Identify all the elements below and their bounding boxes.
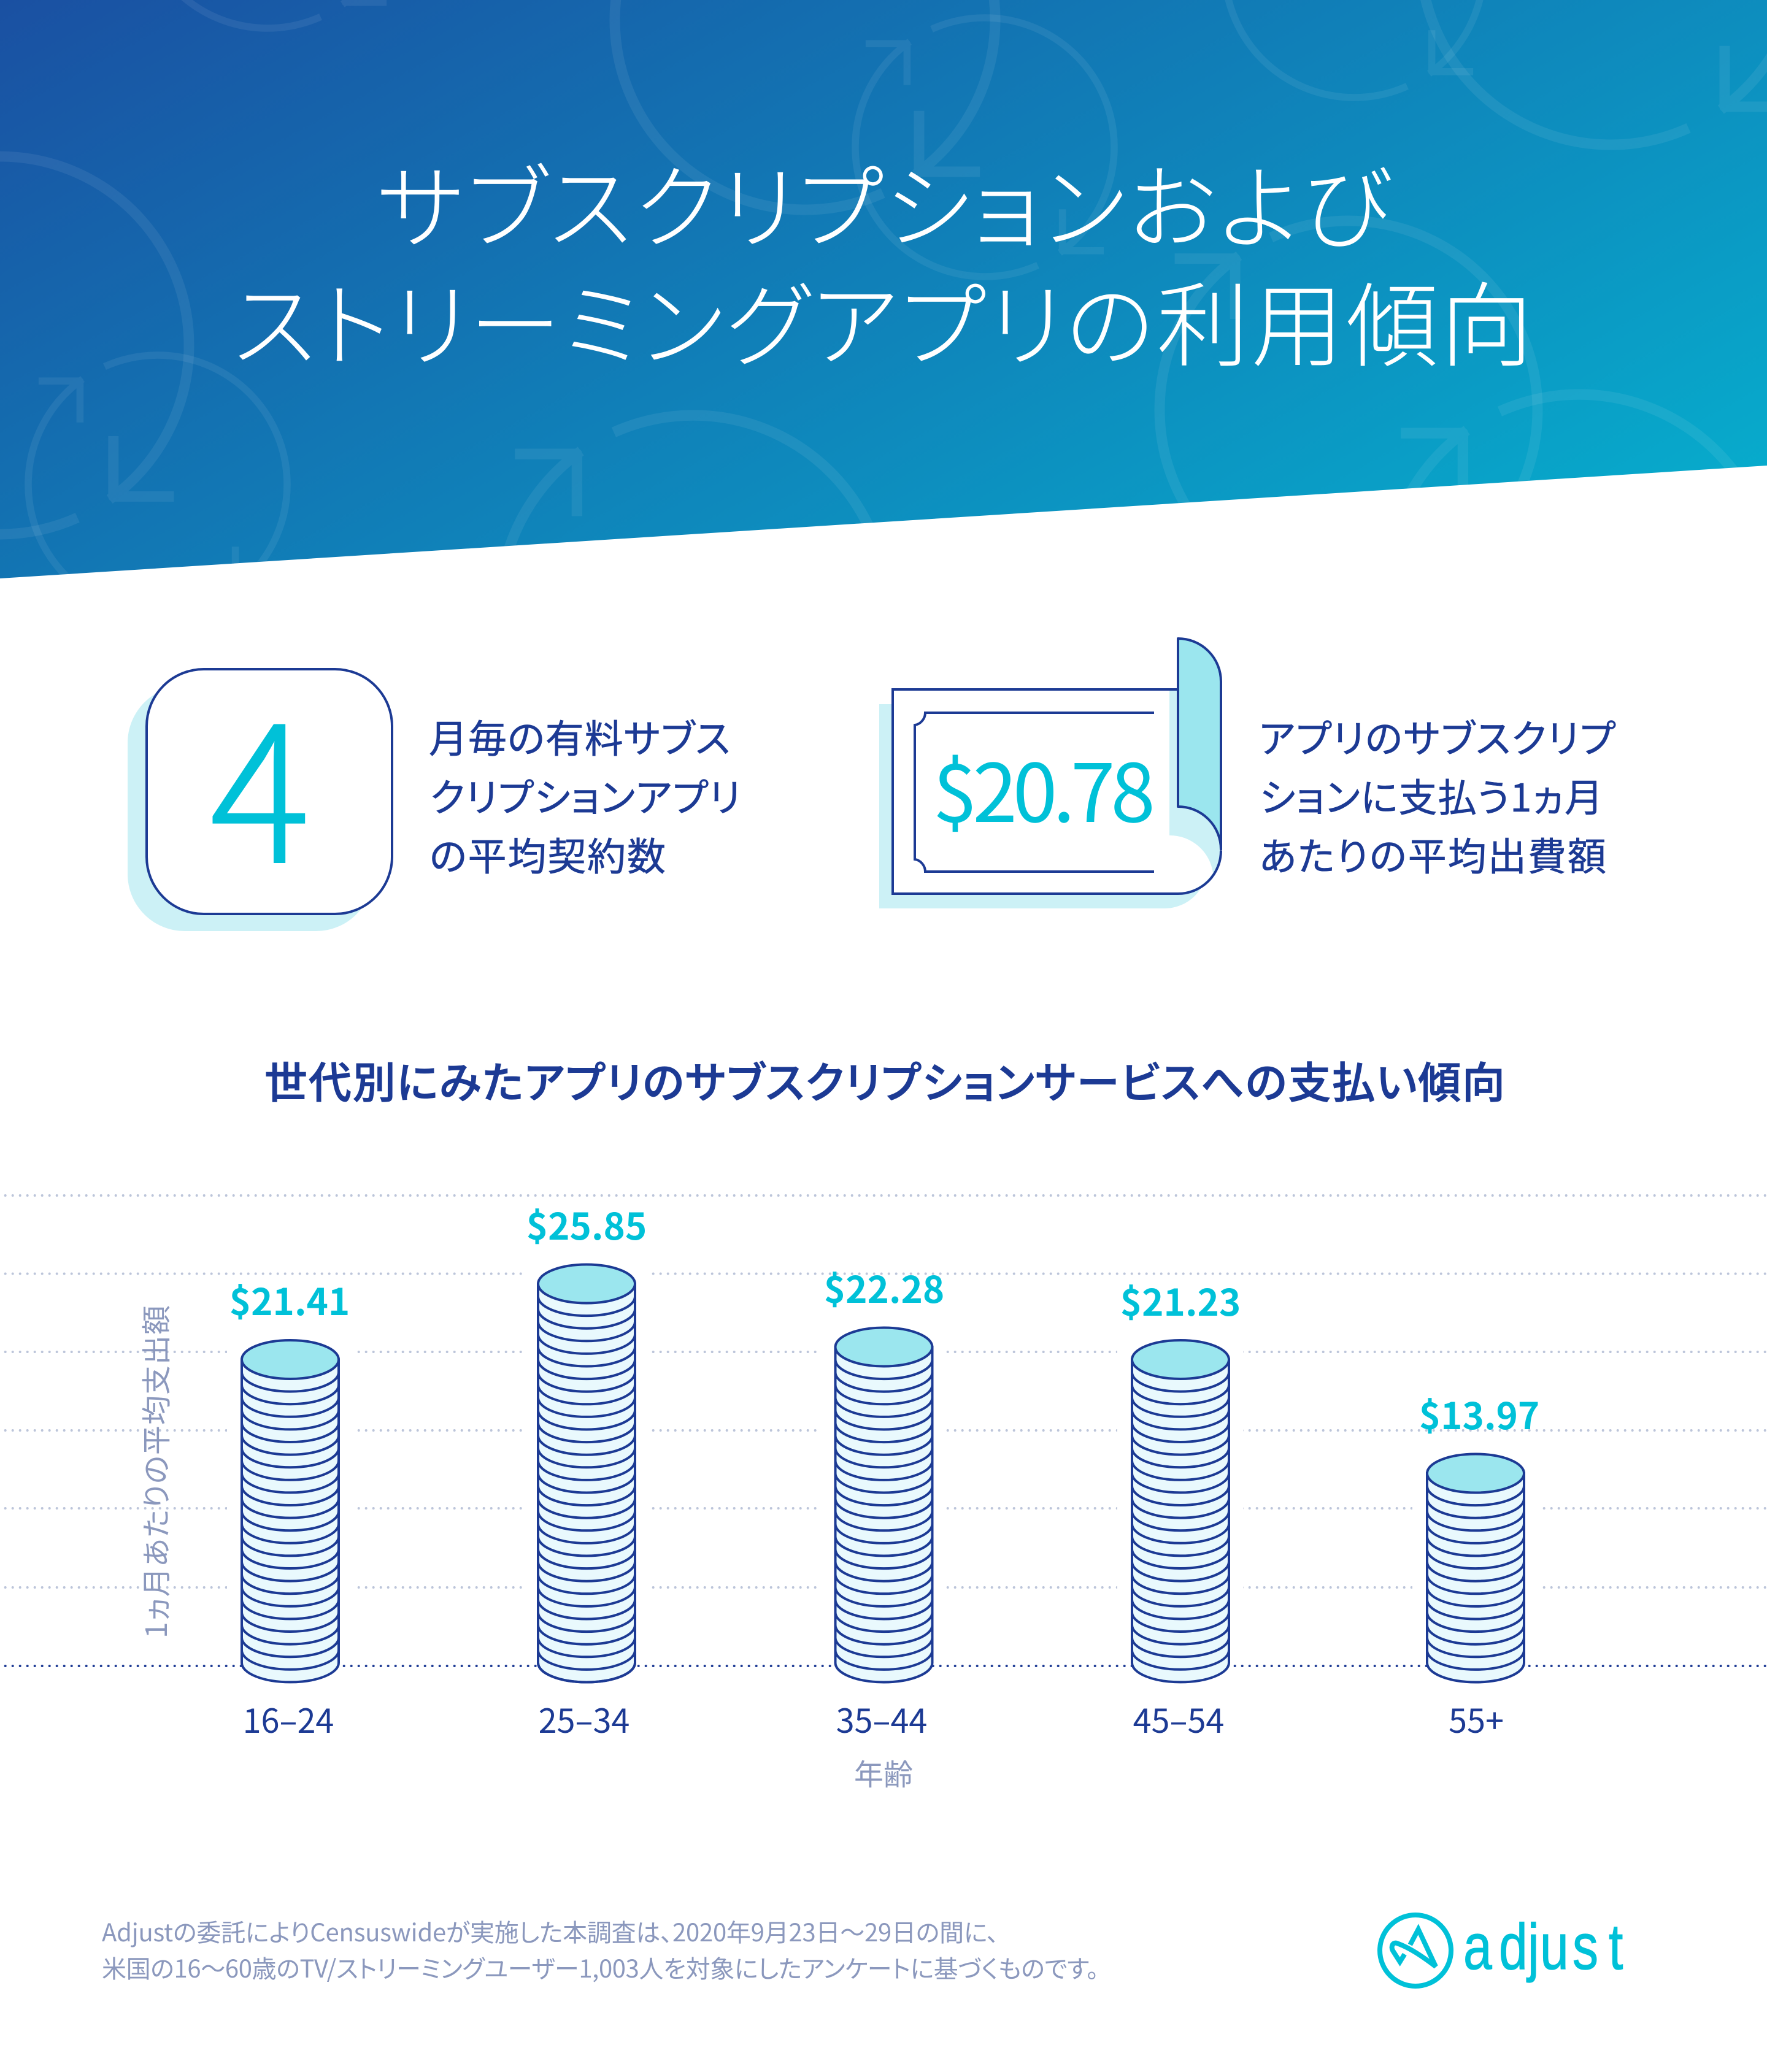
footnote: 米国の16〜60歳のTV/ストリーミングユーザー1,003人を対象にしたアンケートに基づくものです。: [102, 1949, 1099, 1985]
y axis label: 1ヵ月あたりの平均支出額: [133, 1305, 175, 1638]
coin stack 45–54: 45–54: [1133, 1694, 1224, 1743]
stat panel: average monthly spend: [879, 639, 1615, 908]
title: [233, 135, 1533, 386]
coin stack 16–24: [229, 1273, 350, 1743]
text: average number of subscriptions: の平均契約数: [429, 826, 666, 882]
coin stack 25–34: [526, 1197, 647, 1743]
coin stack 25–34: 25–34: [539, 1694, 629, 1743]
coin stack 35–44: 35–44: [836, 1694, 927, 1743]
coin stack 55+: $13.97: [1419, 1387, 1539, 1440]
x axis label: 年齢: [854, 1751, 913, 1794]
coin stack 35–44: $22.28: [824, 1260, 944, 1314]
stat panel: average subscriptions: [128, 643, 741, 931]
title: サブスクリプションおよび: [377, 135, 1391, 268]
text: average number of subscriptions: [429, 708, 741, 882]
text: average monthly spend description: [1259, 708, 1615, 882]
icon: rolled banknote with amount: $20.78: [933, 729, 1155, 845]
chart heading: 世代別にみたアプリのサブスクリプションサービスへの支払い傾向: [264, 1049, 1505, 1111]
coin stack 55+: [1419, 1387, 1539, 1743]
icon: adjust circle mark: [1380, 1915, 1451, 1986]
bar chart: coin stacks by age: [6, 1195, 1767, 1794]
text: average number of subscriptions: クリプションアプリ: [430, 767, 741, 823]
icon: rounded square with number 4: 4: [210, 643, 310, 917]
text: average monthly spend description: ションに支払う1ヵ月: [1260, 767, 1603, 823]
background pattern: refresh arrows: [0, 0, 1767, 803]
coin stack 35–44: [824, 1260, 944, 1743]
logo: adjust: [1380, 1911, 1623, 1986]
logo: adjust: adjust: [1463, 1911, 1623, 1983]
footnote: [102, 1913, 1099, 1985]
icon: rounded square with number 4: [128, 643, 392, 931]
coin stack 45–54: $21.23: [1120, 1273, 1241, 1327]
text: average monthly spend description: あたりの平均出費額: [1259, 826, 1606, 882]
coin stack 55+: 55+: [1449, 1694, 1504, 1743]
baseline: [6, 1665, 1767, 1667]
grid lines: [6, 1195, 1767, 1587]
footnote: Adjustの委託によりCensuswideが実施した本調査は、2020年9月23日〜29日の間に、: [102, 1913, 999, 1949]
coin stack 45–54: [1120, 1273, 1241, 1743]
coin stack 25–34: $25.85: [526, 1197, 647, 1251]
title: ストリーミングアプリの利用傾向: [233, 253, 1533, 386]
coin stack 16–24: 16–24: [243, 1694, 334, 1743]
header banner: [0, 0, 1767, 578]
icon: rolled banknote with amount: [879, 639, 1221, 908]
coin stack 16–24: $21.41: [229, 1273, 350, 1326]
text: average number of subscriptions: 月毎の有料サブス: [429, 708, 730, 764]
text: average monthly spend description: アプリのサブスクリプ: [1259, 708, 1615, 764]
